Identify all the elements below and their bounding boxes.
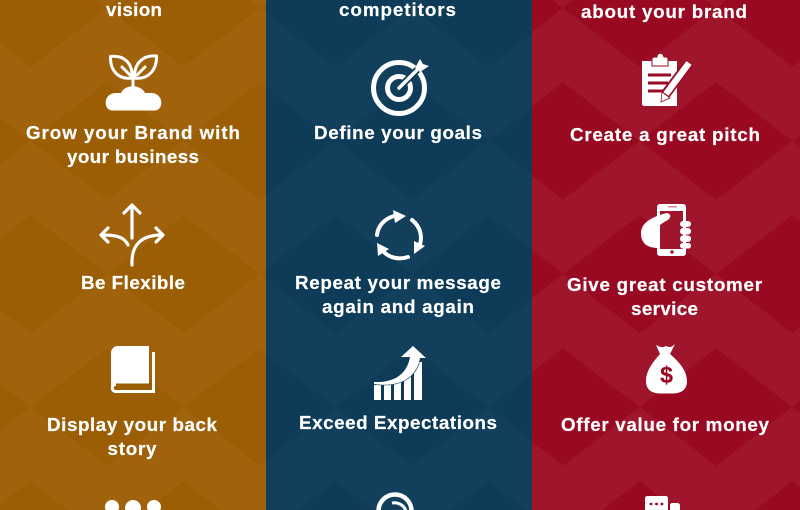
heading: define your goals: Define your goals [314,122,482,143]
panel: blue column [266,0,532,510]
heading: grow your brand: Grow your Brand with [26,122,240,143]
icon: growth chart [374,346,426,400]
icon: partial ring [378,494,412,510]
heading: give great customer service [567,274,763,319]
heading: display your back story: Display your back [47,414,218,435]
heading: offer value for money: Offer value for money [561,414,770,435]
icon: chat bubbles [645,496,680,510]
icon: sprout [106,56,161,110]
icon: target [374,59,429,114]
panel: red column [532,0,800,510]
heading: be flexible: Be Flexible [81,272,185,293]
heading: grow your brand: your business [67,146,199,167]
heading: exceed expectations: Exceed Expectations [299,412,497,433]
icon: three dots [105,500,161,510]
heading: repeat your message [295,272,501,317]
icon: clipboard and pencil [642,53,689,106]
icon: cycle arrows [377,210,425,258]
heading: give great customer service: Give great customer [567,274,763,295]
icon: money bag: $ [660,362,673,388]
heading: give great customer service: service [631,298,698,319]
icon: money bag [646,344,687,394]
heading: repeat your message: Repeat your message [295,272,501,293]
icon: book [111,346,154,392]
heading: create a great pitch: Create a great pitch [570,124,760,145]
heading: grow your brand [26,122,240,167]
heading: repeat your message: again and again [322,296,474,317]
icon: three way arrows [101,205,163,265]
panel: orange column [0,0,266,510]
icon: hand holding phone [641,204,691,256]
heading: display your back story [47,414,218,459]
text: about your brand: about your brand [581,1,747,22]
heading: display your back story: story [108,438,157,459]
